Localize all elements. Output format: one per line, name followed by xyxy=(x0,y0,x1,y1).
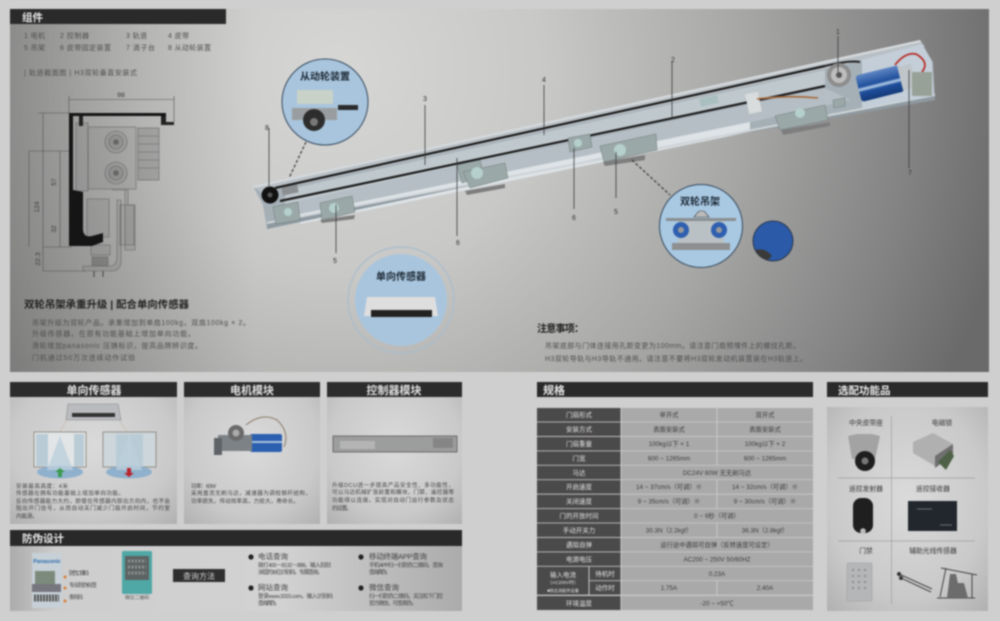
table: specifications: 门扇形式 xyxy=(566,410,592,419)
chart: rail cross-section drawing: 32 xyxy=(51,225,58,233)
table: specifications: 100kg以下 × 2 xyxy=(745,440,786,448)
table: specifications: 环境温度 xyxy=(566,598,592,607)
table: specifications: 36.3N（2.8kgf） xyxy=(742,528,788,534)
table: specifications: 600 ~ 1265mm xyxy=(744,455,786,462)
text block: notes xyxy=(545,341,807,363)
text block: 升级DCU进一步提高产品安全性、多功能性， xyxy=(332,481,454,489)
chart: rail cross-section drawing: 57 xyxy=(51,178,58,186)
text block: 功率损失，传动效率高，力矩大，寿命长。 xyxy=(191,497,299,505)
callout line numbers xyxy=(269,36,909,253)
label sample: 条形码 xyxy=(69,593,83,601)
query: phone: 电话查询 xyxy=(258,551,288,561)
text block: 反向传感器能力大约，即使在传感器内部出方向内，也不会 xyxy=(16,497,170,505)
table: specifications: 安装方式 xyxy=(566,424,592,434)
table: specifications: 输入电流 xyxy=(550,570,576,579)
table: specifications: AC200 ~ 250V 50/60HZ xyxy=(683,556,751,563)
part numbers: 3 xyxy=(423,96,427,103)
query: mobile app: 手机APP扫一扫防伪二维码，查询 xyxy=(369,561,443,569)
heading xyxy=(10,382,177,397)
table: specifications: 运行途中遇阻可自弹（反转速度可设定） xyxy=(660,540,774,549)
parts list: 7 滴子台 xyxy=(126,43,155,52)
heading xyxy=(327,382,462,397)
rail body xyxy=(253,40,935,229)
table: specifications: 动作时 xyxy=(595,583,615,592)
heading: optional accessories xyxy=(827,382,988,397)
table: specifications: 表面安装式 xyxy=(653,424,685,434)
accessory: auxiliary beam sensor xyxy=(897,546,977,598)
panel: motor module xyxy=(184,382,320,524)
heading: components xyxy=(10,9,226,24)
part numbers: 2 xyxy=(671,57,675,64)
query: website xyxy=(248,582,333,607)
part numbers: 1 xyxy=(836,29,840,36)
heading xyxy=(184,382,320,397)
heading: 控制器模块 xyxy=(366,383,422,397)
accessory: remote transmitter xyxy=(849,484,883,534)
table: specifications: 9 ~ 35cm/s（可调）※ xyxy=(638,497,700,506)
part numbers: 4 xyxy=(542,77,546,84)
table: specifications: 开启速度 xyxy=(566,482,592,491)
label sample: 专业防伪标签 xyxy=(69,581,97,589)
text block: 的设置。 xyxy=(332,504,352,512)
table: specifications: 1.75A xyxy=(661,585,678,592)
text block: upgrade description: 吊架升级为双轮产品。承重增加到单扇100kg，双扇100kg × 2。 xyxy=(32,318,250,327)
panel: anti-counterfeit design xyxy=(10,530,462,611)
accessory: remote receiver: 遥控接收器 xyxy=(916,484,950,493)
parts list: 5 吊架 xyxy=(24,44,45,52)
hangers xyxy=(273,98,845,224)
accessory: electromagnetic lock xyxy=(913,418,954,470)
table: specifications: -20 ~ +50℃ xyxy=(700,599,734,607)
part numbers: 5 xyxy=(333,258,337,265)
button: query method xyxy=(173,569,225,582)
illustration: controller xyxy=(333,436,457,452)
table: specifications: 双开式 xyxy=(756,410,775,419)
table: specifications: ■除去选配件设备 xyxy=(547,587,580,594)
text block: upgrade description xyxy=(32,318,250,362)
parts list xyxy=(24,31,211,52)
icon: sensor unit xyxy=(66,404,121,420)
text block: upgrade description: 升级传感器。在原有功能基础上增加单向功能。 xyxy=(32,329,195,338)
heading: specifications xyxy=(537,382,813,397)
query: wechat: 扫一扫防伪二维码，关注松下门控 xyxy=(369,592,443,600)
parts list: 8 从动轮装置 xyxy=(168,43,211,52)
table: specifications: 14 ~ 37cm/s（可调）※ xyxy=(636,482,702,491)
belts xyxy=(275,66,825,188)
text block: 阻出开门信号，从而自动关门减少门扇开启时间，节约室 xyxy=(16,504,170,512)
table: specifications: DC24V 60W 无无刷马达 xyxy=(683,468,752,477)
text block: 安装最高高度：4米 xyxy=(16,482,68,490)
roller strip xyxy=(300,122,750,224)
motor bay xyxy=(862,44,934,108)
table: specifications: 马达 xyxy=(572,468,586,477)
query: mobile app: 查询真伪。 xyxy=(369,568,391,576)
door rail assembly xyxy=(253,40,935,229)
query: phone: 拨打400－8132－888。输入刮刮 xyxy=(258,561,331,569)
parts list: 1 电机 xyxy=(24,31,45,40)
text block: 可以马达机械扩张前置和模块，门禁、遥控器等 xyxy=(332,488,454,496)
table: specifications: 0.23A xyxy=(709,571,726,578)
table: specifications: 600 ~ 1265mm xyxy=(648,455,690,462)
heading: 单向传感器 xyxy=(66,383,122,397)
accessory: central slider: 中央皮带座 xyxy=(849,418,883,427)
parts list: 6 皮带固定装置 xyxy=(60,43,111,52)
text block: 功率：60W xyxy=(191,482,217,490)
heading: specifications: 规格 xyxy=(543,383,565,397)
dashed connectors xyxy=(289,142,670,195)
text block: 内能源。 xyxy=(16,512,38,520)
query: phone xyxy=(248,551,331,576)
cross-section caption: | 轨道截面图 | H3双轮垂直安装式 xyxy=(24,68,137,77)
text block: 功能得以连接。实现对自动门运行参数及状态 xyxy=(332,496,454,504)
illustration: motor xyxy=(214,417,286,455)
accessory: central slider xyxy=(848,418,883,471)
table: specifications: 电源电压 xyxy=(566,554,592,563)
callout: one-way sensor xyxy=(348,247,454,353)
part numbers: 5 xyxy=(614,209,618,216)
QR code: 微信二维码 xyxy=(125,594,149,601)
text block: 传感器在拥有功能基础上增加单向功能。 xyxy=(16,489,124,497)
panel: optional accessories xyxy=(827,407,988,611)
panel: one-way sensor xyxy=(10,382,177,524)
table: specifications: 0 ~ 9秒（可调） xyxy=(694,511,740,520)
end wheel xyxy=(262,186,278,204)
table: specifications: 手动开关力 xyxy=(563,526,595,534)
parts list: 3 轨道 xyxy=(126,31,147,40)
accessory: access control xyxy=(847,546,873,601)
callout: driven wheel device: 从动轮装置 xyxy=(300,70,350,83)
chart: rail cross-section drawing xyxy=(29,92,174,277)
table: specifications: 14 ~ 32cm/s（可调）※ xyxy=(732,482,798,491)
text block: upgrade description: 滑轮增加panasonic 压铸标识，提高品牌辨识度。 xyxy=(32,341,202,350)
table: specifications: 遇阻自弹 xyxy=(566,540,592,549)
part numbers xyxy=(265,29,912,265)
parts list: 2 控制器 xyxy=(60,31,89,40)
accessory: access control: 门禁 xyxy=(859,546,873,555)
table: specifications: 2.40A xyxy=(757,585,774,592)
table: specifications: 待机时 xyxy=(595,569,615,578)
button: query method: 查询方法 xyxy=(183,571,215,581)
panel: components overview xyxy=(10,9,989,372)
text block xyxy=(16,482,170,520)
heading: components: 组件 xyxy=(22,11,43,24)
query: wechat: 官方微信，可查真伪。 xyxy=(369,599,417,607)
accessory: auxiliary beam sensor: 辅助光线传感器 xyxy=(909,546,957,555)
label sample: Panasonic xyxy=(33,559,61,565)
table: specifications: 9 ~ 30cm/s（可调）※ xyxy=(734,497,796,506)
query: website: 网站查询 xyxy=(258,582,288,592)
heading: 电机模块 xyxy=(230,383,274,397)
part numbers: 6 xyxy=(572,215,576,222)
table: specifications: 门的开放时间 xyxy=(560,511,598,520)
callout: wheel close-up xyxy=(753,221,793,261)
heading xyxy=(10,530,462,546)
controller unit xyxy=(699,95,719,107)
table: specifications: 100kg以下 × 1 xyxy=(649,440,690,448)
text block: 采用直流无刷马达，减速器为调校钢杆结构， xyxy=(191,489,311,497)
heading: notes: 注意事项： xyxy=(537,322,584,335)
query: website: 查询真伪。 xyxy=(258,599,280,607)
part numbers: 7 xyxy=(908,170,912,177)
table: specifications xyxy=(537,408,813,610)
label sample: 防伪二维码 xyxy=(69,569,89,577)
accessory: electromagnetic lock: 电磁锁 xyxy=(932,418,952,427)
part numbers: 6 xyxy=(456,240,460,247)
text block xyxy=(332,481,454,512)
text block xyxy=(191,482,311,505)
table: specifications: 关闭速度 xyxy=(566,497,592,506)
chart: rail cross-section drawing: 22.3 xyxy=(35,252,42,266)
illustration: door detection zones xyxy=(34,421,156,478)
text block: notes: H3双轮导轨与H3导轨不通用。请注意不要将H3双轮发动机装置装在H3轨道上。 xyxy=(545,354,807,363)
table: specifications: 表面安装式 xyxy=(749,424,781,434)
part numbers: 8 xyxy=(265,125,269,132)
table: specifications: 门扇重量 xyxy=(566,439,592,448)
table: specifications: （AC200V时） xyxy=(548,579,578,585)
query: wechat xyxy=(358,582,443,607)
table: specifications: 单开式 xyxy=(660,410,679,419)
query: website: 登录www.3315.com。输入识别码 xyxy=(258,592,333,600)
heading: 防伪设计 xyxy=(22,532,64,545)
query: phone: 涂层的16位识别码。专属查询。 xyxy=(258,568,323,576)
callout: double wheel hanger xyxy=(660,184,742,268)
parts list: 4 皮带 xyxy=(168,31,189,40)
QR code xyxy=(122,551,152,601)
text block: upgrade description: 门机通过50万次连续动作试验 xyxy=(32,353,135,362)
query: mobile app: 移动终端APP查询 xyxy=(369,551,428,561)
panel: controller module xyxy=(327,382,462,524)
text block: notes: 吊架底部与门体连接用孔距变更为100mm。请注意门扇预埋件上的螺纹孔距。 xyxy=(545,341,800,350)
callout: driven wheel device xyxy=(282,59,368,145)
chart: rail cross-section drawing: 124 xyxy=(34,201,41,213)
callout: one-way sensor: 单向传感器 xyxy=(376,270,426,283)
accessory: remote receiver xyxy=(908,484,957,531)
chart: rail cross-section drawing: 98 xyxy=(117,92,125,99)
table: specifications: 30.3N（2.2kgf） xyxy=(646,528,692,534)
query: mobile app xyxy=(358,551,443,576)
accessory: remote transmitter: 遥控发射器 xyxy=(849,484,883,493)
callout: double wheel hanger: 双轮吊架 xyxy=(680,195,720,208)
label sample xyxy=(32,553,97,608)
query: wechat: 微信查询 xyxy=(369,582,400,592)
heading: double wheel hanger upgrade: 双轮吊架承重升级 | 配合单向传感器 xyxy=(24,298,190,311)
heading: optional accessories: 选配功能品 xyxy=(838,384,890,397)
table: specifications: 门宽 xyxy=(572,453,586,462)
motor xyxy=(827,54,932,102)
